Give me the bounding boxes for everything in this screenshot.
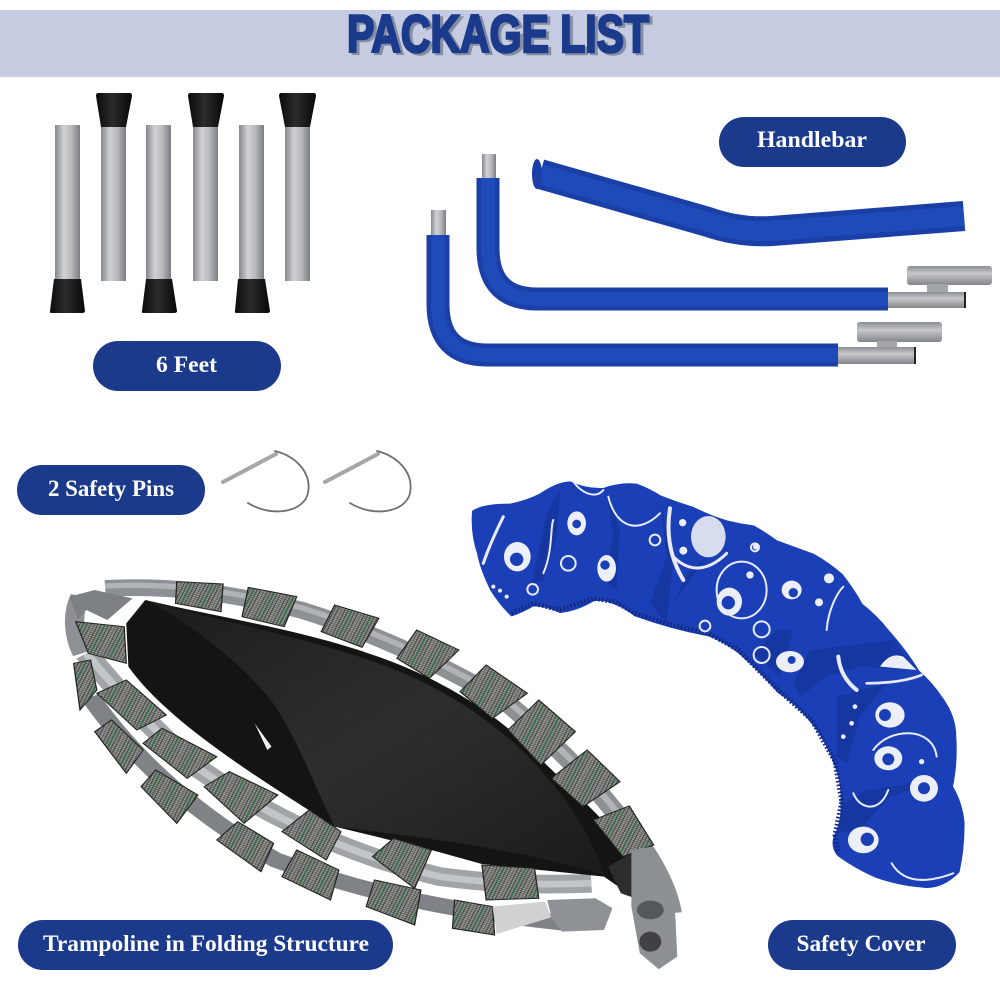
printed arcs and rings: [483, 482, 953, 880]
frame straps: [74, 582, 654, 935]
frame tubes: [75, 585, 671, 923]
icon: handlebar parts: [431, 154, 992, 364]
middle bar: [488, 178, 888, 299]
label: Handlebar: [719, 117, 906, 167]
white gap in mat: [255, 723, 271, 750]
main mat flap: [145, 600, 604, 875]
label: 6 Feet: [93, 341, 281, 391]
printed eyes: [491, 511, 938, 853]
lower bar: [438, 235, 838, 355]
middle bar fittings: [482, 154, 992, 308]
title banner: PACKAGE LIST: [350, 7, 652, 66]
icon: folded trampoline: [69, 582, 677, 969]
tube end socket: [631, 847, 677, 969]
dark corner mesh: [608, 853, 640, 900]
icon: safety cover: [473, 482, 963, 887]
label: 2 Safety Pins: [17, 465, 205, 515]
label: 2 Safety Pins: 2 Safety Pins: [48, 476, 174, 501]
label: Safety Cover: Safety Cover: [796, 931, 926, 956]
eye pupils: [510, 520, 930, 846]
gathered elastic edge: [512, 598, 842, 853]
label: Trampoline in Folding Structure: [18, 920, 393, 970]
bottom hinge bracket: [547, 898, 612, 932]
upper bar: [532, 159, 964, 231]
label: Safety Cover: [768, 920, 956, 970]
title banner: PACKAGE LIST: [347, 5, 649, 64]
title banner: [0, 5, 1000, 77]
label: Handlebar: Handlebar: [757, 127, 867, 152]
silver end plate: [492, 902, 551, 934]
dark folds: [532, 490, 937, 833]
lower bar fittings: [431, 210, 942, 364]
rear mat layer: [126, 600, 638, 900]
icon: safety pins: [223, 451, 411, 511]
icon: six feet tubes: [50, 93, 316, 313]
label: 6 Feet: 6 Feet: [156, 352, 217, 377]
top-left hinge: [69, 590, 133, 620]
label: Trampoline in Folding Structure: Trampoline in Folding Structure: [43, 931, 369, 956]
